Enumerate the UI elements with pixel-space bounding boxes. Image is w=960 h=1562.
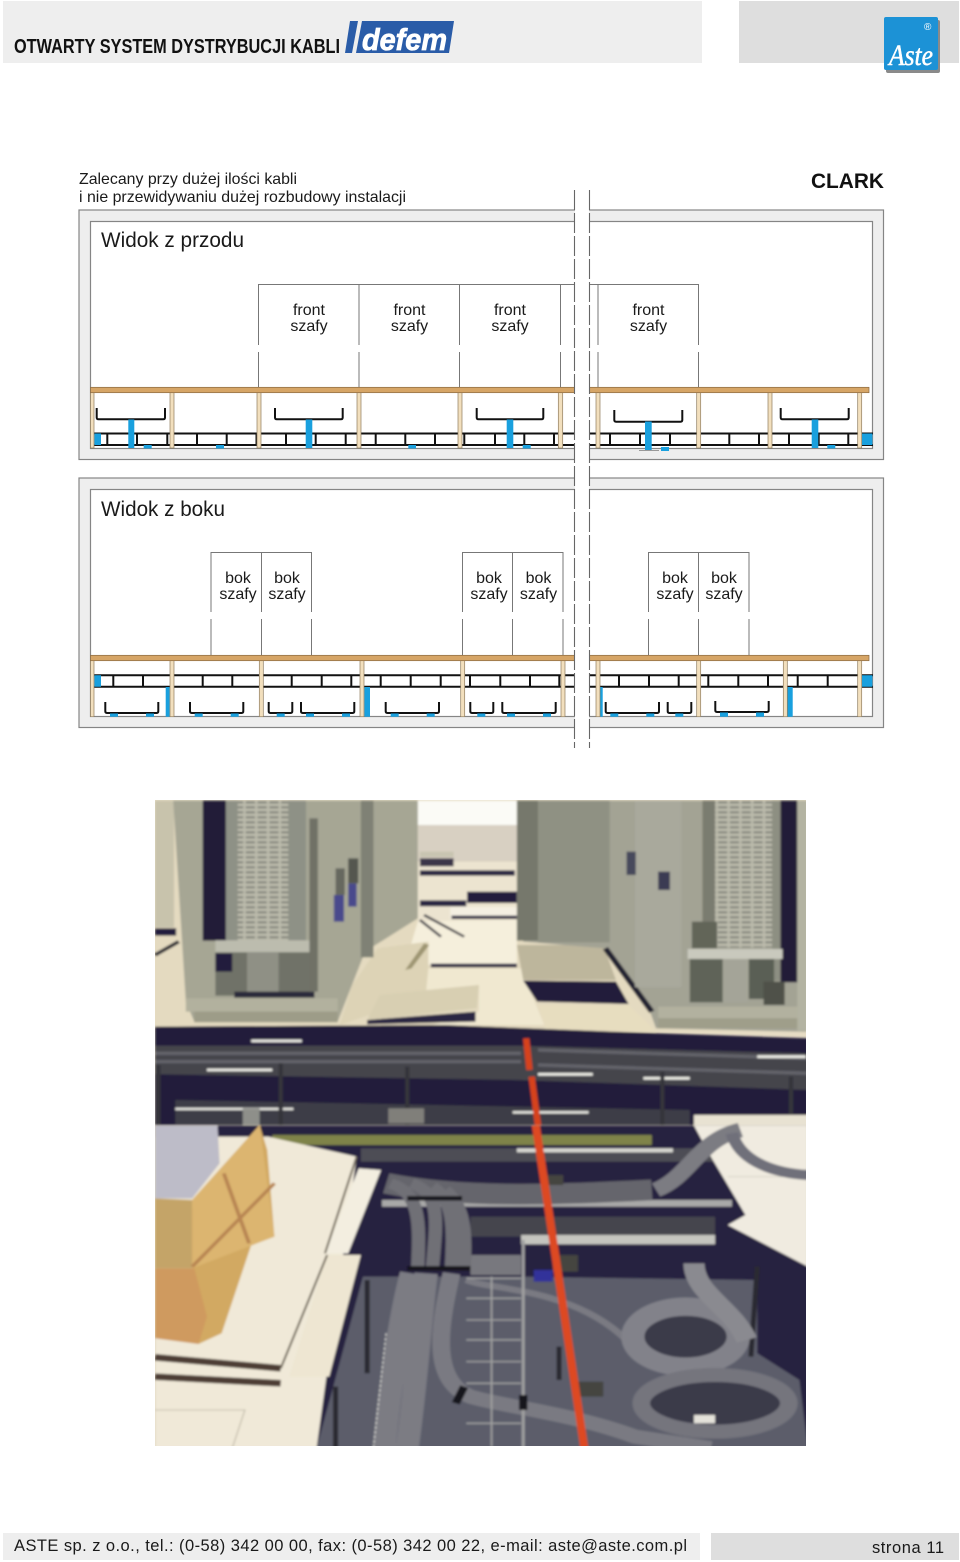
cabinets: side: szafy bbox=[656, 586, 694, 603]
cable ladder: side bbox=[94, 675, 873, 687]
footer: left bar with contact line bbox=[3, 1533, 700, 1560]
cabinets: side bbox=[211, 552, 749, 655]
cabinets: side: bok bbox=[662, 570, 689, 587]
footer: right bar with page number: strona 11 bbox=[872, 1539, 944, 1557]
intro text: i nie przewidywaniu dużej rozbudowy instalacji bbox=[79, 189, 406, 206]
cabinets: front: front bbox=[494, 302, 527, 319]
cabinets: side: szafy bbox=[705, 586, 743, 603]
heading: side view: Widok z boku bbox=[101, 498, 225, 521]
cabinets: front: szafy bbox=[290, 318, 328, 335]
cabinets: side: bok bbox=[711, 570, 738, 587]
cabinets: front: szafy bbox=[491, 318, 529, 335]
cabinets: side: bok bbox=[526, 570, 552, 587]
cabinets: side: bok bbox=[274, 570, 301, 587]
title: OTWARTY SYSTEM DYSTRYBUCJI KABLI bbox=[14, 36, 340, 58]
cabinets: side: bok bbox=[225, 570, 252, 587]
photo: open cable trays under raised floor bbox=[155, 800, 810, 1449]
cabinets: front: szafy bbox=[391, 318, 428, 335]
cabinets: front: front bbox=[632, 302, 665, 319]
photo upper part: cabinets and floor bbox=[155, 801, 810, 1127]
trays and pedestals: front bbox=[94, 408, 872, 451]
floor plank and posts: front bbox=[90, 387, 869, 448]
cabinets: front: front bbox=[293, 302, 326, 319]
cabinets: side: bok bbox=[476, 570, 503, 587]
intro text bbox=[79, 171, 406, 206]
intro text: Zalecany przy dużej ilości kabli bbox=[79, 171, 297, 188]
logo: Aste: Aste bbox=[887, 39, 933, 72]
header: right grey bar bbox=[739, 1, 959, 63]
system name: CLARK: CLARK bbox=[811, 170, 884, 193]
footer: left bar with contact line: ASTE sp. z o.o., tel.: (0-58) 342 00 00, fax: (0-58) 342 00 22, e-mail: aste@aste.com.pl bbox=[14, 1537, 687, 1555]
cabinets: side: szafy bbox=[219, 586, 257, 603]
floor plank and posts: side bbox=[90, 655, 869, 717]
photo lower part: cables in floor void bbox=[155, 1125, 809, 1449]
cable ladder: front bbox=[94, 434, 873, 445]
panel: front view bbox=[79, 210, 884, 460]
cabinets: front: front bbox=[393, 302, 426, 319]
logo: defem: defem bbox=[362, 22, 447, 57]
panel: side view bbox=[79, 478, 884, 728]
cabinets: front bbox=[258, 284, 698, 387]
heading: front view: Widok z przodu bbox=[101, 229, 244, 252]
logo: Aste: ® bbox=[924, 22, 932, 33]
footer: right bar with page number bbox=[711, 1533, 959, 1560]
trays and supports: side bbox=[94, 675, 872, 717]
cabinets: side: szafy bbox=[520, 586, 557, 603]
cabinets: side: szafy bbox=[470, 586, 508, 603]
break marks: dashed gap through both panels bbox=[574, 190, 590, 748]
cabinets: side: szafy bbox=[268, 586, 306, 603]
logo: Aste bbox=[884, 17, 940, 73]
header: left bar with title and logo bbox=[3, 1, 702, 63]
cabinets: front: szafy bbox=[630, 318, 667, 335]
